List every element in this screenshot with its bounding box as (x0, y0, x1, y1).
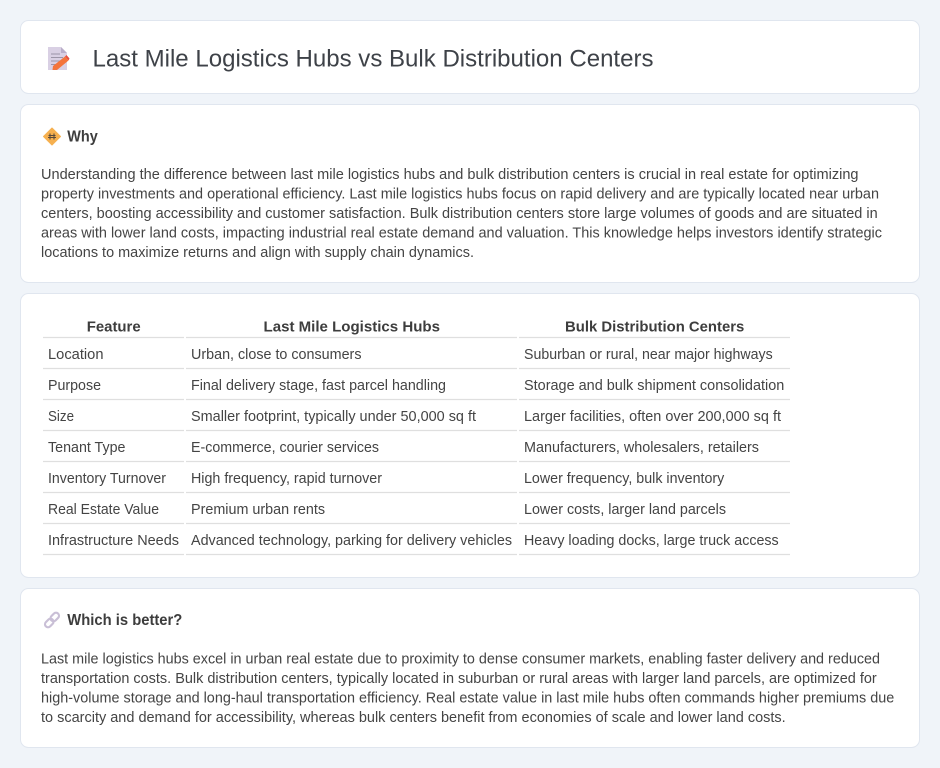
table header row: Bulk Distribution Centers (565, 318, 744, 336)
text block: why paragraph: property investments and operational efficiency. Last mile logistics hubs focus on rapid delivery and are typically located near urban (41, 186, 879, 202)
panel: why (20, 104, 920, 282)
icon: diamond road sign (44, 128, 60, 145)
table row: location: Suburban or rural, near major highways (524, 347, 773, 363)
table row: purpose: Final delivery stage, fast parcel handling (191, 378, 446, 394)
heading: which is better: Which is better? (67, 612, 182, 629)
text block: which is better paragraph: transportation costs. Bulk distribution centers, typically located in suburban or rural areas with larger land parcels, are optimized for (41, 671, 877, 687)
table row: infrastructure needs: Infrastructure Needs (48, 533, 179, 549)
table row: tenant type: E-commerce, courier services (191, 440, 379, 456)
icon: chain link (44, 612, 60, 628)
table row: tenant type (43, 440, 790, 462)
table row: tenant type: Manufacturers, wholesalers, retailers (524, 440, 759, 456)
title: Last Mile Logistics Hubs vs Bulk Distribution Centers (92, 46, 654, 73)
table row: size: Larger facilities, often over 200,000 sq ft (524, 409, 781, 425)
table row: purpose: Storage and bulk shipment consolidation (524, 378, 784, 394)
text block: why paragraph: areas with lower land costs, impacting industrial real estate demand and valuation. This knowledge helps investors identify strategic (41, 226, 882, 242)
table row: location: Urban, close to consumers (191, 347, 362, 363)
text block: which is better paragraph: Last mile logistics hubs excel in urban real estate due to proximity to dense consumer markets, enabling faster delivery and reduced (41, 651, 880, 667)
text block: why paragraph: locations to maximize returns and align with supply chain dynamics. (41, 245, 474, 261)
table row: size (43, 409, 790, 430)
table header row (43, 318, 790, 338)
table row: real estate value (43, 502, 790, 524)
table row: inventory turnover: Inventory Turnover (48, 471, 166, 487)
text block: which is better paragraph: to scarcity and demand for accessibility, whereas bulk centers benefit from economies of scale and lower land costs. (41, 710, 786, 726)
table row: real estate value: Real Estate Value (48, 502, 159, 518)
table header row: Feature (87, 318, 141, 336)
table row: real estate value: Lower costs, larger land parcels (524, 502, 726, 518)
text block: why paragraph: Understanding the difference between last mile logistics hubs and bulk distribution centers is crucial in real estate for optimizing (41, 167, 859, 183)
heading: why: Why (67, 129, 98, 146)
table row: purpose: Purpose (48, 378, 101, 394)
panel: comparison table (20, 294, 920, 578)
table row: tenant type: Tenant Type (48, 440, 126, 456)
text block: why paragraph (41, 167, 882, 261)
table row: infrastructure needs: Advanced technology, parking for delivery vehicles (191, 533, 512, 549)
table row: inventory turnover: Lower frequency, bulk inventory (524, 471, 725, 487)
table row: inventory turnover: High frequency, rapid turnover (191, 471, 382, 487)
text block: why paragraph: centers, boosting accessibility and customer satisfaction. Bulk distribution centers store large volumes of goods and are situated in (41, 206, 878, 222)
table row: purpose (43, 378, 790, 400)
table row: infrastructure needs: Heavy loading docks, large truck access (524, 533, 779, 549)
table row: real estate value: Premium urban rents (191, 502, 325, 518)
table row: size: Size (48, 409, 74, 425)
table row: location (43, 347, 790, 368)
icon: document with pencil (48, 47, 70, 70)
table row: inventory turnover (43, 471, 790, 492)
table row: infrastructure needs (43, 533, 790, 554)
text block: which is better paragraph (41, 651, 894, 726)
table header row: Last Mile Logistics Hubs (264, 318, 440, 336)
text block: which is better paragraph: high-volume storage and long-haul transportation efficiency. Real estate value in last mile hubs often commands higher premiums due (41, 690, 894, 706)
panel: which is better (20, 588, 920, 748)
panel: header (20, 20, 920, 94)
table row: size: Smaller footprint, typically under 50,000 sq ft (191, 409, 476, 425)
table row: location: Location (48, 347, 104, 363)
